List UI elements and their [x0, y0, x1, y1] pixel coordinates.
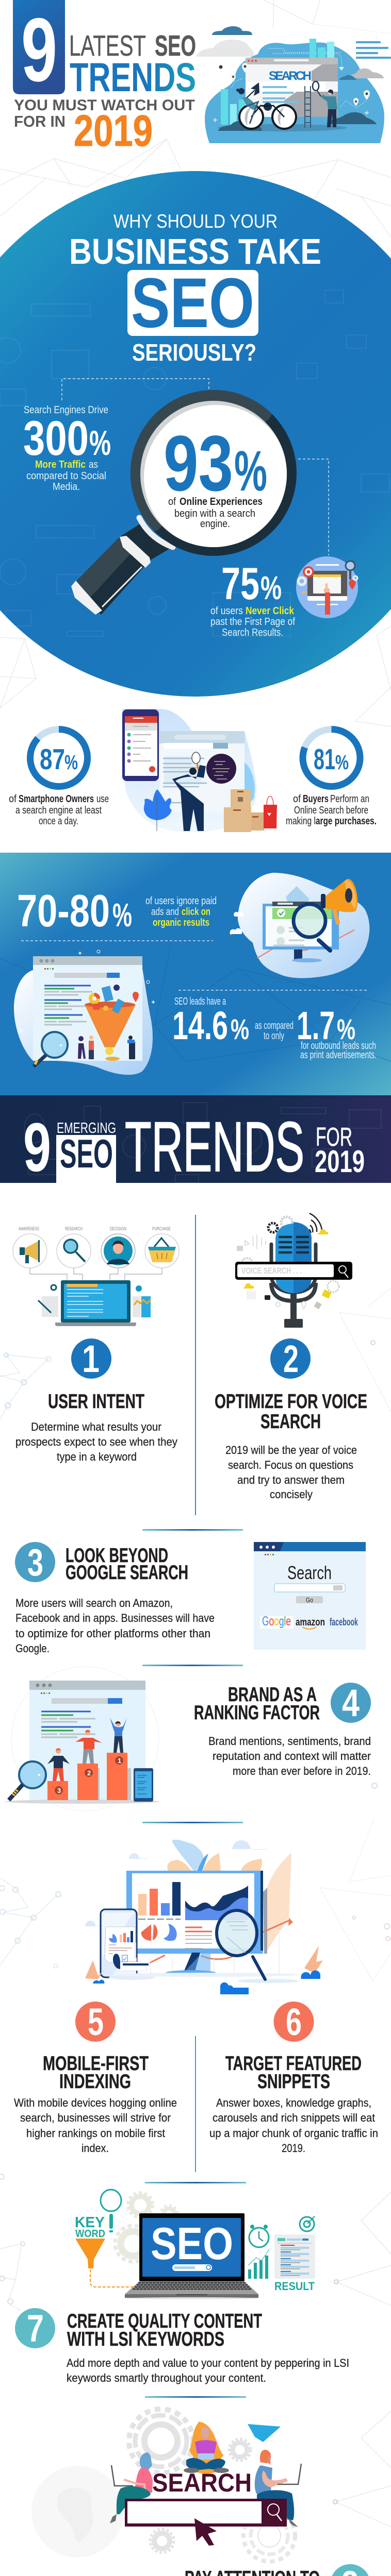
- number badge 4: [331, 1682, 371, 1724]
- title: emerging: EMERGING: [57, 1120, 116, 1137]
- stat: 75 percent: Never Click: [246, 605, 295, 617]
- stat: 93 percent: engine.: [200, 518, 230, 530]
- description: Add more depth and value to your content by peppering in LSI: [67, 2357, 349, 2369]
- heading: latest SEO: LATEST: [69, 29, 146, 62]
- divider: [142, 1665, 243, 1666]
- heading: MOBILE-FIRST: [43, 2053, 149, 2075]
- illustration: people on search bar: [31, 2409, 301, 2562]
- description: [67, 2357, 349, 2384]
- description: concisely: [270, 1488, 313, 1501]
- heading: [67, 2310, 262, 2350]
- description: 2019.: [282, 2142, 305, 2155]
- number badge 1: 1: [82, 1337, 100, 1380]
- illustration: SEO laptop with keyword and result: RESULT: [274, 2280, 315, 2293]
- heading: CREATE QUALITY CONTENT: [67, 2310, 262, 2332]
- chart: donut 87 percent: %: [64, 751, 78, 774]
- illustration: microphone with voice search bar: VOICE SEARCH . . .: [241, 1266, 302, 1276]
- illustration: search browser with bicycle and people: SEARCH: [269, 69, 312, 83]
- heading: [194, 1684, 320, 1724]
- illustration: people on search bar: SEARCH: [152, 2468, 252, 2497]
- description: Google.: [15, 1642, 50, 1655]
- stat: 300 percent: as: [89, 459, 98, 470]
- dashed connector: 300 percent: [62, 379, 209, 400]
- number badge 7: 7: [27, 2307, 44, 2350]
- stat: 300 percent: Media.: [53, 481, 80, 493]
- heading: [43, 2053, 149, 2093]
- stat: 93 percent: begin with a search: [174, 508, 255, 519]
- trend 8: technical SEO: [104, 2563, 370, 2576]
- illustration: funnel stages and laptop: RESEARCH: [65, 1226, 83, 1231]
- number badge 3: [15, 1541, 55, 1584]
- number badge 8: [330, 2563, 370, 2576]
- trend 2: voice search: [215, 1213, 367, 1501]
- trend 6: target featured snippets: [209, 2001, 378, 2155]
- illustration: SEO laptop with keyword and result: WORD: [75, 2228, 105, 2240]
- description: Determine what results your: [31, 1420, 161, 1433]
- number badge 6: 6: [286, 2001, 302, 2043]
- stat: SEO leads 14.6 vs 1.7: [172, 996, 377, 1061]
- heading: GOOGLE SEARCH: [66, 1562, 188, 1584]
- description: With mobile devices hogging online: [14, 2096, 177, 2109]
- heading: SEARCH: [260, 1411, 321, 1433]
- heading: RANKING FACTOR: [194, 1702, 320, 1724]
- number badge 1: [71, 1337, 111, 1380]
- stat: 300 percent: More Traffic: [35, 459, 86, 470]
- heading: BRAND AS A: [228, 1684, 317, 1706]
- description: reputation and context will matter: [213, 1750, 371, 1762]
- illustration: funnel stages and laptop: PURCHASE: [152, 1226, 171, 1231]
- text: smartphone owners: use: [96, 793, 109, 805]
- illustration: search browser panel: facebook: [330, 1617, 359, 1628]
- illustration: podium over browser: 3: [57, 1787, 61, 1794]
- stat: 93 percent: of: [168, 496, 176, 507]
- title: for 2019: [315, 1122, 365, 1179]
- heading: latest SEO: SEO: [155, 29, 196, 62]
- number badge 5: 5: [88, 2001, 104, 2043]
- illustration: podium over browser: 2: [87, 1769, 91, 1777]
- description: [209, 2096, 378, 2155]
- description: [14, 2096, 177, 2155]
- illustration: shopper with phone and browser: [122, 709, 277, 833]
- stat: SEO leads 14.6 vs 1.7: %: [231, 1013, 249, 1045]
- number badge 5: [75, 2001, 116, 2043]
- description: Answer boxes, knowledge graphs,: [216, 2096, 371, 2109]
- chart: donut 87 percent: 87: [40, 743, 65, 776]
- illustration: search browser panel: Go: [306, 1596, 313, 1604]
- heading: SNIPPETS: [257, 2071, 330, 2093]
- text: smartphone owners: a search engine at least: [15, 805, 102, 816]
- illustration: funnel stages and laptop: AWARENESS: [19, 1226, 39, 1231]
- stat: 93 percent: [164, 419, 267, 530]
- white box: SEO: SEO: [131, 264, 254, 343]
- stat: 300 percent: 300: [23, 411, 89, 466]
- number badge 7: [15, 2307, 55, 2350]
- chart: donut 87 percent: [30, 730, 88, 786]
- text: buyers: Buyers: [303, 793, 329, 805]
- illustration: search browser panel: [254, 1542, 366, 1650]
- chart: donut 81 percent: [303, 730, 360, 786]
- number badge 6: [273, 2001, 314, 2043]
- description: Facebook and in apps. Businesses will have: [15, 1612, 215, 1624]
- icon: click on results monitor: [296, 556, 358, 618]
- trend 7: quality content: [15, 2307, 349, 2384]
- stat: 75 percent: of users: [210, 605, 243, 617]
- text: smartphone owners: of: [9, 793, 17, 805]
- tab: SEO: [56, 1131, 116, 1183]
- description: up a major chunk of organic traffic in: [209, 2127, 378, 2140]
- stat: 300 percent: [23, 404, 111, 493]
- stat: 70-80 percent: [17, 885, 217, 936]
- divider: [142, 1529, 243, 1531]
- stat: 70-80 percent: %: [112, 896, 132, 934]
- stat: 70-80 percent: of users ignore paid: [145, 895, 217, 907]
- text: buyers: Online Search before: [294, 805, 368, 816]
- tab: SEO: SEO: [60, 1131, 113, 1176]
- heading: trends: TRENDS: [70, 54, 196, 100]
- title block: 9 latest SEO trends you must watch out for in 2019: [13, 0, 196, 156]
- stat: 300 percent: Search Engines Drive: [24, 404, 108, 416]
- stat: 93 percent: 93: [164, 419, 233, 507]
- illustration: analytics monitor and phone: [85, 1840, 323, 1994]
- trend 1: user intent: [13, 1226, 179, 1463]
- illustration: funnel stages and laptop: DECISION: [110, 1226, 126, 1231]
- number badge 3: 3: [27, 1541, 43, 1584]
- heading: you must watch out: YOU MUST WATCH OUT: [14, 97, 195, 114]
- stat: 70-80 percent: ads and: [151, 906, 179, 918]
- title: why should your: WHY SHOULD YOUR: [113, 211, 278, 232]
- stat: 75 percent: past the First Page of: [210, 616, 295, 628]
- stat: 75 percent: Search Results.: [222, 627, 283, 638]
- stat: SEO leads 14.6 vs 1.7: as compared: [255, 1020, 294, 1031]
- title number 9: 9: [23, 1109, 51, 1186]
- vertical divider: trends 1 and 2: [195, 1215, 196, 1515]
- heading: [225, 2053, 362, 2093]
- title: for 2019: FOR: [316, 1122, 352, 1151]
- description: more than ever before in 2019.: [233, 1765, 371, 1777]
- description: [15, 1597, 215, 1655]
- number badge 4: 4: [342, 1682, 360, 1724]
- stat: SEO leads 14.6 vs 1.7: %: [337, 1013, 355, 1045]
- stat: 75 percent: [210, 558, 295, 638]
- illustration: SEO laptop with keyword and result: [75, 2190, 315, 2299]
- chart: donut 81 percent: %: [335, 751, 349, 774]
- stat: SEO leads 14.6 vs 1.7: to only: [264, 1030, 284, 1042]
- heading: [215, 1391, 367, 1433]
- heading: INDEXING: [59, 2071, 131, 2093]
- description: [15, 1420, 177, 1463]
- stat: 93 percent: Online Experiences: [180, 496, 263, 507]
- stat: SEO leads 14.6 vs 1.7: 14.6: [172, 1004, 228, 1048]
- text: smartphone owners: once a day.: [39, 816, 78, 827]
- blue tab with numeral 9: 9: [21, 0, 57, 100]
- illustration: microphone with voice search bar: [235, 1213, 352, 1328]
- number badge 2: [270, 1337, 311, 1380]
- description: [225, 1444, 357, 1501]
- panel: why SEO circle: [0, 171, 391, 697]
- heading: for in: FOR IN: [14, 112, 66, 130]
- description: Brand mentions, sentiments, brand: [208, 1735, 371, 1748]
- divider: [145, 2396, 246, 2398]
- text: buyers: Perform an: [330, 793, 369, 805]
- stat: SEO leads 14.6 vs 1.7: SEO leads have a: [174, 996, 226, 1007]
- title: for 2019: 2019: [315, 1144, 365, 1179]
- illustration: SEO laptop with keyword and result: KEY: [75, 2214, 105, 2231]
- stat: 70-80 percent: organic results: [153, 917, 209, 928]
- chart: donut 81 percent: 81: [314, 743, 335, 776]
- text: smartphone owners: [9, 793, 109, 827]
- illustration: browser funnel and magnifier: [14, 950, 155, 1075]
- illustration: search browser panel: Search: [287, 1562, 332, 1583]
- decorative ghost icons: [24, 1103, 381, 1183]
- magnifier with 93 percent: [71, 390, 297, 615]
- description: search, businesses will strive for: [20, 2111, 171, 2124]
- description: search. Focus on questions: [228, 1459, 353, 1471]
- stat: 70-80 percent: 70-80: [17, 885, 110, 936]
- decorative ring: [372, 1783, 377, 1788]
- stat: 75 percent: 75: [221, 558, 259, 609]
- illustration: podium over browser: 1: [118, 1757, 121, 1765]
- description: index.: [82, 2142, 109, 2155]
- illustration: podium over browser: [5, 1667, 160, 1811]
- heading: USER INTENT: [48, 1391, 144, 1413]
- text: buyers: [286, 793, 377, 827]
- description: higher rankings on mobile first: [26, 2127, 165, 2140]
- divider: [142, 1822, 243, 1823]
- stat: 75 percent: %: [260, 569, 282, 606]
- description: [208, 1735, 371, 1777]
- network pattern: header: [0, 0, 391, 726]
- dashed connector: 75 percent: [298, 459, 329, 555]
- trend 5: mobile-first indexing: [14, 2001, 177, 2155]
- stat: SEO leads 14.6 vs 1.7: 1.7: [297, 1004, 335, 1048]
- trend 3: look beyond google search: [15, 1541, 366, 1655]
- illustration: search browser with bicycle and people: [196, 26, 391, 143]
- illustration: SEO laptop with keyword and result: SEO: [151, 2218, 233, 2269]
- stat: 300 percent: compared to Social: [26, 470, 106, 482]
- panel: 9 emerging SEO trends banner: [0, 1095, 391, 1187]
- divider: [145, 2182, 246, 2183]
- text: smartphone owners: Smartphone Owners: [19, 793, 94, 805]
- description: type in a keyword: [57, 1450, 137, 1463]
- description: More users will search on Amazon,: [15, 1597, 173, 1609]
- illustration: monitor magnifier megaphone: [230, 873, 369, 978]
- heading: 2019: 2019: [74, 107, 153, 156]
- panel: blue statistics band: [0, 853, 391, 1095]
- trend 4: brand as a ranking factor: [5, 1667, 377, 1811]
- heading: LOOK BEYOND: [66, 1545, 168, 1567]
- heading: [66, 1545, 188, 1584]
- network pattern: trends area: [0, 1288, 391, 2576]
- stat: 300 percent: %: [89, 423, 111, 463]
- description: keywords smartly throughout your content.: [67, 2371, 266, 2384]
- illustration: funnel stages and laptop: [13, 1226, 179, 1326]
- text: buyers: of: [293, 793, 301, 805]
- decorative ghost icons: [0, 290, 389, 636]
- illustration: search browser panel: Google: [262, 1614, 291, 1629]
- title: seriously: SERIOUSLY?: [132, 339, 256, 366]
- heading: WITH LSI KEYWORDS: [67, 2328, 224, 2350]
- illustration: search browser panel: amazon: [296, 1617, 325, 1628]
- stat: 70-80 percent: click on: [182, 906, 210, 918]
- text: buyers: making l: [286, 816, 316, 827]
- description: to optimize for other platforms other than: [15, 1627, 210, 1640]
- vertical divider: trends 5 and 6: [195, 2036, 196, 2172]
- title: business take: BUSINESS TAKE: [69, 231, 321, 272]
- number badge 2: 2: [283, 1337, 299, 1380]
- description: and try to answer them: [237, 1473, 345, 1486]
- stat: 93 percent: %: [234, 439, 267, 503]
- description: prospects expect to see when they: [15, 1435, 177, 1448]
- description: carousels and rich snippets will eat: [213, 2111, 375, 2124]
- description: 2019 will be the year of voice: [225, 1444, 357, 1456]
